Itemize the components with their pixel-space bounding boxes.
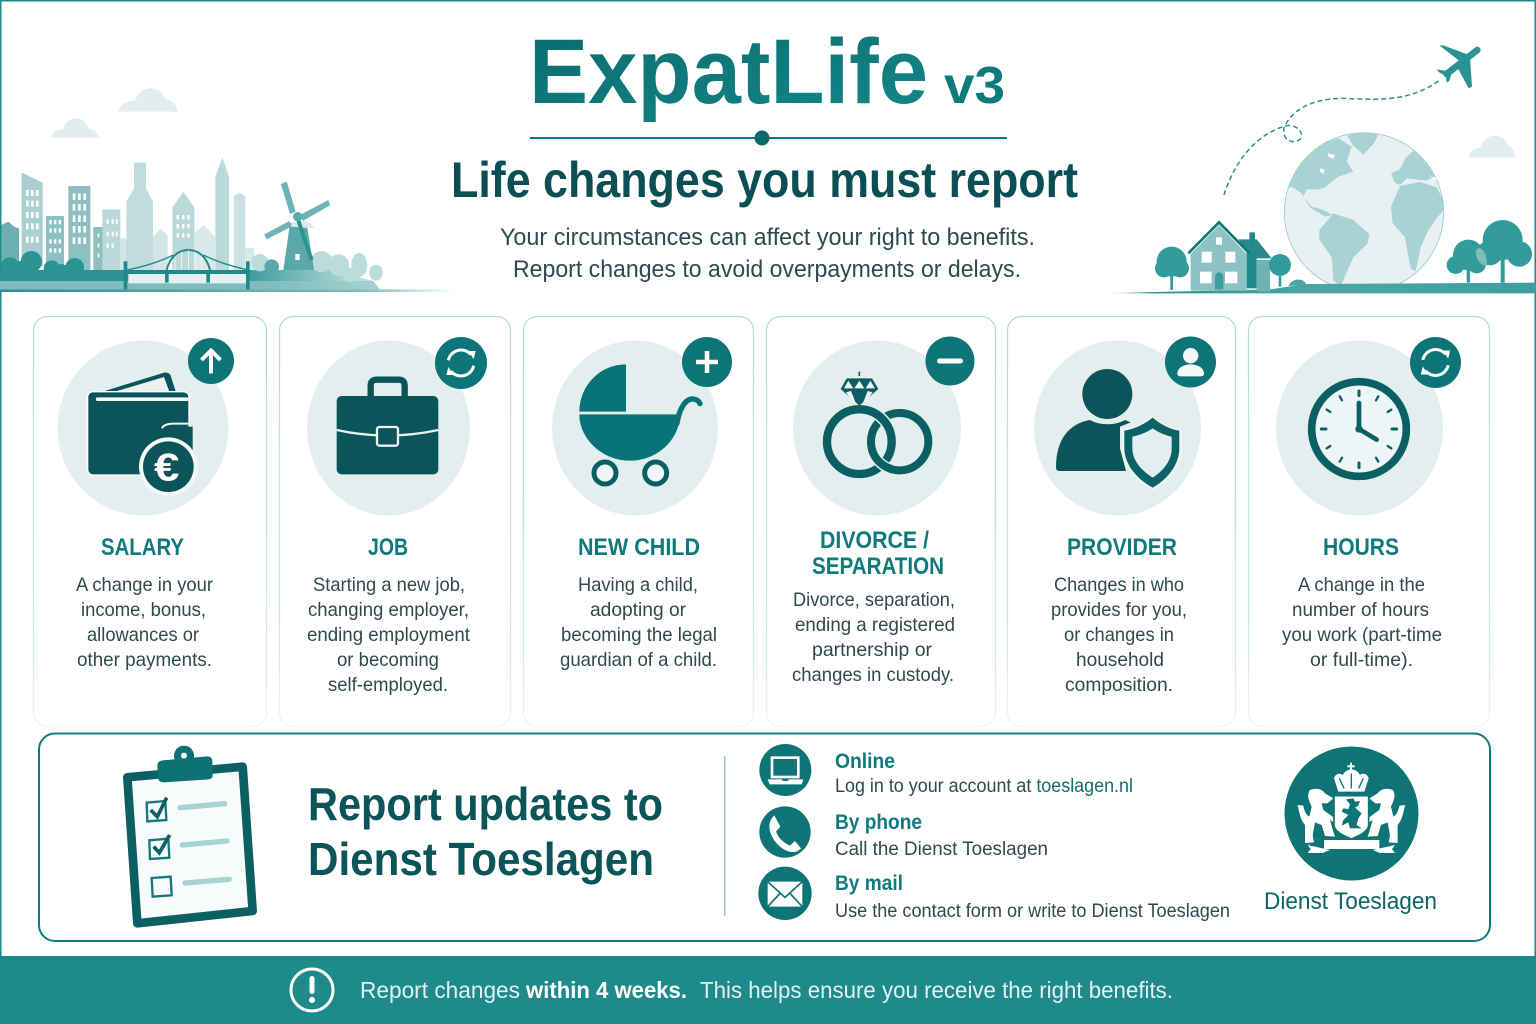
contact: by mail: Use the contact form or write to Dienst Toeslagen <box>835 901 1230 922</box>
description: Starting a new job, <box>313 574 465 596</box>
intro text: Report changes to avoid overpayments or delays. <box>513 256 1021 283</box>
heading: DIVORCE / <box>820 527 929 554</box>
description <box>76 574 213 671</box>
description: provides for you, <box>1051 599 1187 621</box>
contact: by phone: By phone <box>835 811 922 834</box>
footer message: within 4 weeks. <box>525 977 687 1003</box>
contact: online <box>759 744 1133 797</box>
description: income, bonus, <box>81 599 206 621</box>
description: changes in custody. <box>792 664 954 686</box>
badge: up arrow <box>188 338 234 384</box>
windmill <box>251 181 383 282</box>
icon: two rings with diamond <box>827 372 928 474</box>
footer message: Report changes <box>360 977 520 1003</box>
house <box>1188 222 1272 292</box>
description: ending employment <box>307 624 471 646</box>
title: ExpatLife v3: ExpatLife <box>529 21 928 123</box>
badge: refresh <box>435 337 487 389</box>
flight path <box>1224 80 1440 195</box>
card: divorce / separation <box>766 316 996 726</box>
description: composition. <box>1065 674 1173 696</box>
globe <box>1284 131 1447 292</box>
description: you work (part-time <box>1282 624 1442 646</box>
icon: baby stroller <box>579 364 700 484</box>
description: guardian of a child. <box>560 649 717 671</box>
illustration: globe, house, trees and airplane <box>1097 45 1536 293</box>
intro text: Your circumstances can affect your right to benefits. <box>500 224 1035 251</box>
description: Having a child, <box>578 574 698 596</box>
description: becoming the legal <box>561 624 717 646</box>
badge: plus <box>682 337 732 387</box>
subtitle: Life changes you must report <box>451 152 1078 208</box>
illustration: Dutch cityscape with bridge and windmill <box>0 88 456 292</box>
airplane <box>1437 45 1477 88</box>
description <box>1282 574 1442 671</box>
card: hours: HOURS <box>1323 534 1399 561</box>
description: or changes in <box>1064 624 1174 646</box>
description: ending a registered <box>795 614 955 636</box>
ground <box>1097 283 1536 293</box>
footer message <box>360 977 1173 1003</box>
card: new child <box>524 316 754 726</box>
contact: by phone: Call the Dienst Toeslagen <box>835 839 1048 860</box>
description <box>307 574 471 696</box>
footer message: This helps ensure you receive the right benefits. <box>700 977 1173 1003</box>
description: A change in the <box>1298 574 1425 596</box>
contact: online: Online <box>835 750 895 773</box>
description: partnership or <box>812 639 932 661</box>
intro text <box>500 224 1035 283</box>
description <box>792 589 955 686</box>
title divider with dot <box>530 130 1007 146</box>
icon: person with shield <box>1056 369 1182 490</box>
description: allowances or <box>87 624 199 646</box>
contact: by mail <box>758 867 1230 922</box>
logo: Dienst Toeslagen coat of arms <box>1264 746 1437 915</box>
card: hours <box>1248 316 1490 726</box>
bridge and trees over the ground <box>0 250 456 292</box>
badge: person <box>1165 336 1216 388</box>
contact: by phone <box>759 806 1048 860</box>
logo: Dienst Toeslagen coat of arms: Dienst Toeslagen <box>1264 888 1437 915</box>
icon: clipboard checklist <box>127 746 253 923</box>
description <box>1051 574 1187 696</box>
card: salary: SALARY <box>101 534 184 561</box>
description <box>560 574 717 671</box>
icon: briefcase <box>337 380 438 474</box>
description: A change in your <box>76 574 213 596</box>
description: or full-time). <box>1310 649 1413 671</box>
description: number of hours <box>1292 599 1429 621</box>
icon: exclamation <box>291 969 333 1011</box>
description: adopting or <box>590 599 686 621</box>
panel: report updates <box>39 734 1490 941</box>
heading <box>812 527 944 580</box>
title: ExpatLife v3: v3 <box>944 57 1005 115</box>
card: salary <box>34 316 266 726</box>
contact: by mail: By mail <box>835 872 903 895</box>
card: new child: NEW CHILD <box>578 534 700 561</box>
icon: wallet with euro coin: € <box>154 447 179 490</box>
card: job: JOB <box>368 534 408 561</box>
description: changing employer, <box>308 599 469 621</box>
badge: refresh <box>1410 337 1461 388</box>
icon: clock <box>1312 382 1406 476</box>
description: Changes in who <box>1054 574 1184 596</box>
heading: report updates to Dienst Toeslagen: Report updates to <box>308 778 663 830</box>
description: Divorce, separation, <box>793 589 955 611</box>
trees <box>1155 220 1532 290</box>
heading: report updates to Dienst Toeslagen <box>308 778 663 885</box>
heading: SEPARATION <box>812 553 944 580</box>
footer banner <box>0 956 1536 1024</box>
description: self-employed. <box>328 674 448 696</box>
description: other payments. <box>77 649 212 671</box>
contact: online: Log in to your account at toeslagen.nl <box>835 776 1133 797</box>
icon: wallet with euro coin <box>87 372 198 496</box>
card: provider <box>1008 316 1236 726</box>
badge: minus <box>926 336 974 386</box>
card: provider: PROVIDER <box>1067 534 1177 561</box>
description: or becoming <box>337 649 439 671</box>
card: job <box>280 316 510 726</box>
description: household <box>1076 649 1164 671</box>
heading: report updates to Dienst Toeslagen: Dienst Toeslagen <box>308 833 654 885</box>
